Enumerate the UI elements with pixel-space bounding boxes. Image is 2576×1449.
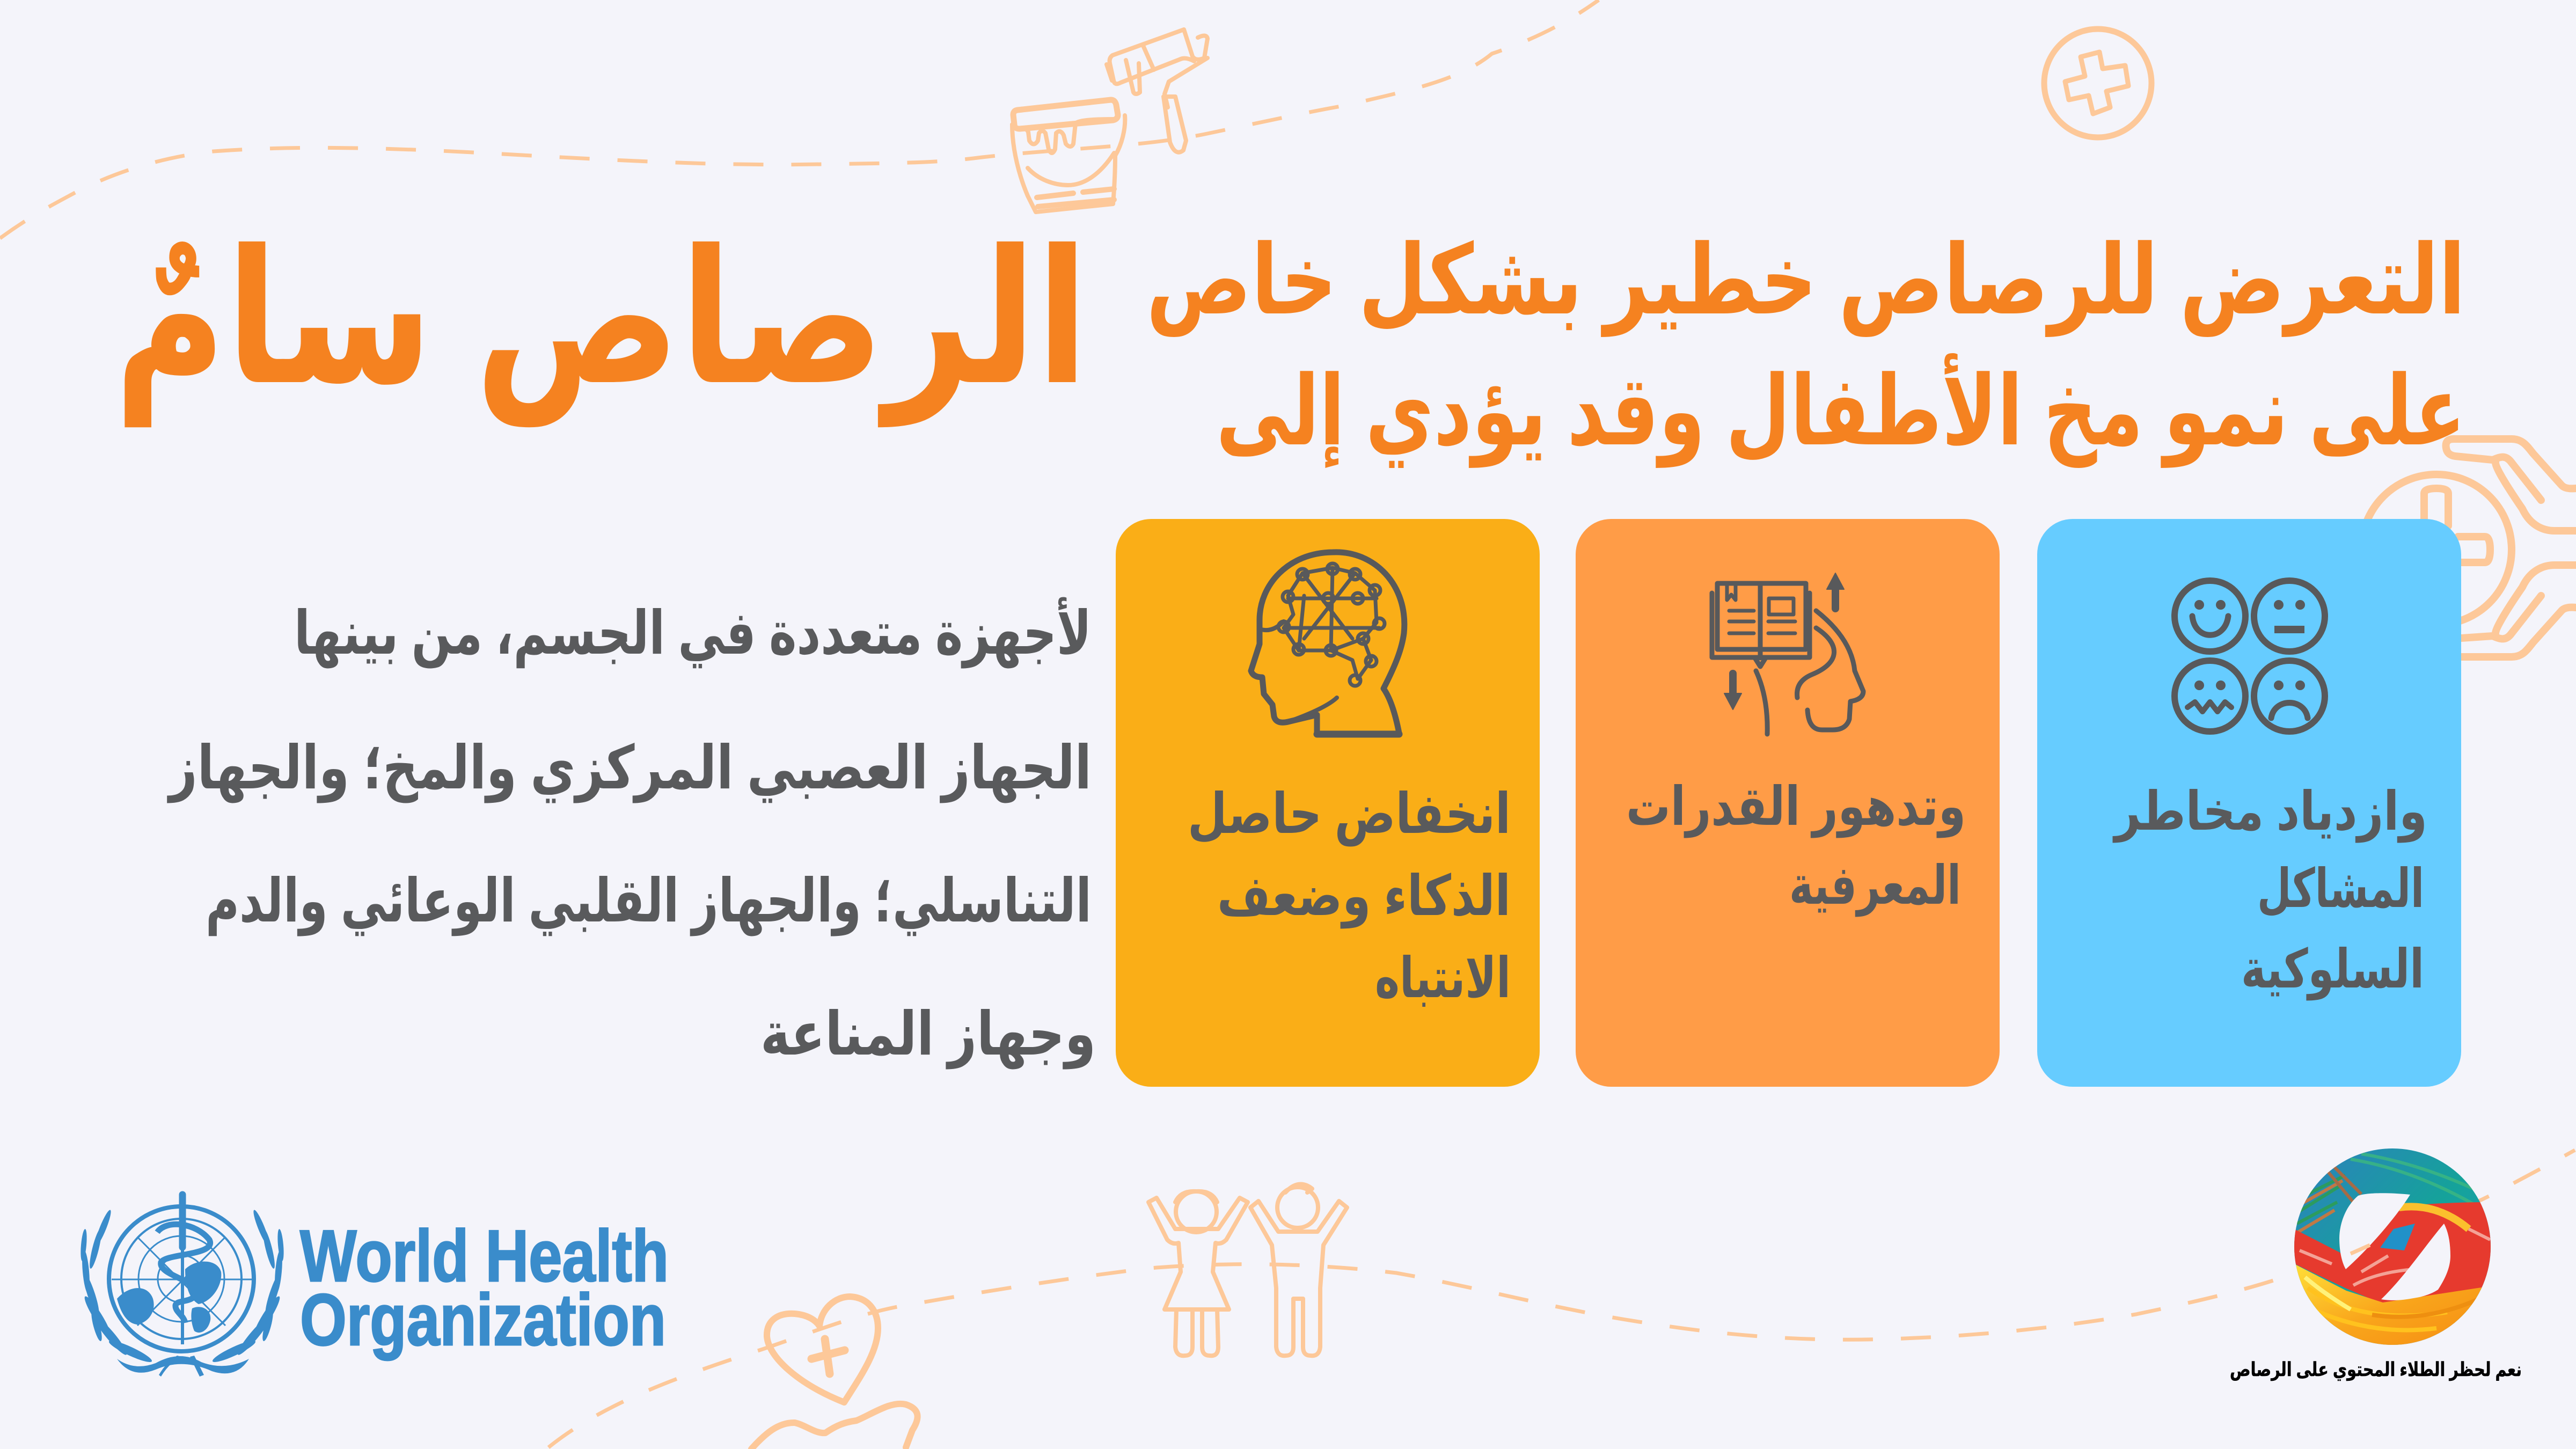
- icon: two children with raised arms: [1148, 1184, 1347, 1356]
- text block: affected body systems: الجهاز العصبي المركزي والمخ؛ والجهاز: [167, 734, 1092, 803]
- icon: hands holding medical wheel: [2361, 439, 2576, 657]
- panel: behavioural problems: [2037, 519, 2461, 1087]
- panel: cognitive decline: [1576, 519, 2000, 1087]
- icon: paint bucket and roller: [1012, 30, 1208, 212]
- logo: World Health Organization: [79, 1195, 669, 1377]
- card text: السلوكية: [2241, 939, 2424, 1001]
- panel: lower intelligence: [1116, 519, 1540, 1087]
- wordmark: [300, 1215, 669, 1360]
- text block: affected body systems: [167, 597, 1096, 1070]
- card text: [1188, 783, 1511, 1009]
- card text: الانتباه: [1375, 947, 1511, 1009]
- card text: المعرفية: [1789, 855, 1961, 917]
- icon: four emotion faces: [2175, 581, 2325, 731]
- card text: [2112, 781, 2427, 1001]
- card text: المشاكل: [2257, 859, 2424, 919]
- card text: انخفاض حاصل: [1188, 783, 1511, 847]
- card text: وتدهور القدرات: [1626, 777, 1966, 838]
- subtitle: [1146, 226, 2465, 469]
- icon: medical cross in circle: [2044, 29, 2151, 137]
- text block: affected body systems: وجهاز المناعة: [760, 1000, 1096, 1070]
- title: الرصاص سامٌ: [114, 215, 1088, 428]
- card text: وازدياد مخاطر: [2112, 781, 2427, 843]
- icon: heart with cross on open hand: [751, 1297, 918, 1449]
- text block: affected body systems: التناسلي؛ والجهاز القلبي الوعائي والدم: [206, 867, 1092, 936]
- card text: [1626, 777, 1966, 917]
- icon: book, head and arrows: [1712, 573, 1863, 734]
- text block: affected body systems: لأجهزة متعددة في الجسم، من بينها: [294, 597, 1092, 669]
- card text: الذكاء وضعف: [1217, 865, 1511, 929]
- wordmark: Organization: [300, 1279, 666, 1360]
- wordmark: World Health: [300, 1215, 669, 1297]
- icon: head with brain network: [1251, 552, 1404, 734]
- emblem: [109, 1195, 254, 1351]
- logo: lead paint alliance brushstroke: [2289, 1146, 2496, 1352]
- laurel: [79, 1209, 285, 1377]
